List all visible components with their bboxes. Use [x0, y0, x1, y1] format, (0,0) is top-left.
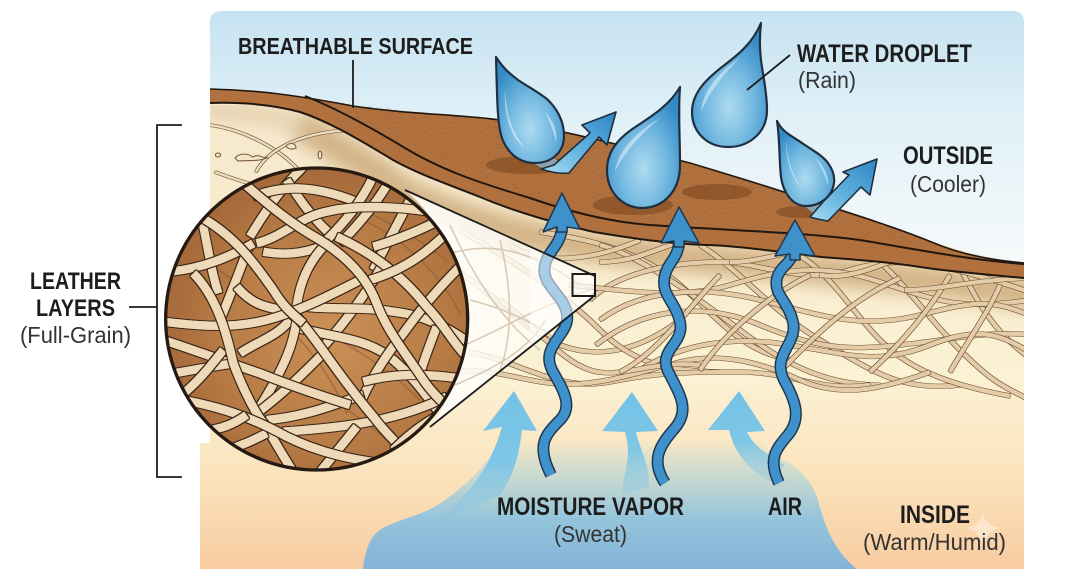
label: inside: INSIDE: [900, 501, 970, 529]
drop contact shadows: [535, 158, 820, 213]
panel: warm interior background: [200, 95, 1024, 569]
vapor arrow 3: [708, 391, 785, 482]
label: inside: [863, 501, 1006, 555]
blobs: pores in upper layer: [215, 144, 322, 161]
vapor cloud: [363, 440, 857, 569]
label: leather layers: (Full-Grain): [20, 322, 131, 348]
label: leather layers: LAYERS: [36, 295, 115, 322]
lens wedge lines: [405, 190, 595, 427]
label: outside: [903, 142, 993, 197]
water droplet 1: [496, 57, 564, 163]
bent arrow 2: vapor exits: [810, 159, 877, 221]
magnified area marker: [572, 274, 595, 296]
label: water droplet: WATER DROPLET: [797, 40, 972, 68]
label: outside: OUTSIDE: [903, 142, 993, 170]
fibers: upper left strands: [210, 123, 344, 184]
pressure stains on leather: [486, 156, 824, 218]
leather grain texture: [300, 96, 934, 252]
label: water droplet: [747, 40, 972, 93]
magnifier circle: [163, 160, 470, 483]
circle fibers: [163, 160, 470, 483]
water droplet 4: [777, 121, 834, 206]
sparkle: [966, 513, 1000, 550]
panel: sky background: [210, 11, 1024, 300]
leather layers bracket: [129, 125, 182, 477]
moisture vapor wavy arrow 2: [658, 207, 699, 483]
label: leather layers: LEATHER: [30, 268, 121, 295]
leather surface band: [210, 89, 1024, 278]
label: breathable surface: BREATHABLE SURFACE: [238, 33, 473, 59]
label: water droplet: (Rain): [798, 67, 856, 93]
label: moisture vapor: (Sweat): [554, 521, 627, 547]
bent arrow 1: vapor exits: [541, 112, 616, 173]
label: leather layers: [20, 268, 131, 348]
panel: scene contents: [200, 23, 1040, 569]
faint fibers inside lens wedge: [445, 225, 590, 385]
water droplet 2: [607, 87, 680, 208]
water droplet 3: [692, 23, 767, 147]
fibers: leather fiber layer: [440, 230, 1030, 400]
label: inside: (Warm/Humid): [863, 529, 1006, 555]
vapor arrow 2: [602, 392, 658, 495]
lens overlay over arrow: [530, 247, 595, 347]
air wavy arrow 3: [774, 220, 815, 483]
label: air: AIR: [768, 493, 802, 521]
label: moisture vapor: MOISTURE VAPOR: [497, 493, 684, 521]
label: moisture vapor: [497, 493, 684, 547]
lens wedge: [405, 190, 595, 427]
surface lines: [210, 89, 1024, 278]
label: outside: (Cooler): [910, 171, 986, 197]
moisture vapor wavy arrow 1: [543, 193, 580, 475]
vapor arrow 1: [450, 391, 537, 511]
